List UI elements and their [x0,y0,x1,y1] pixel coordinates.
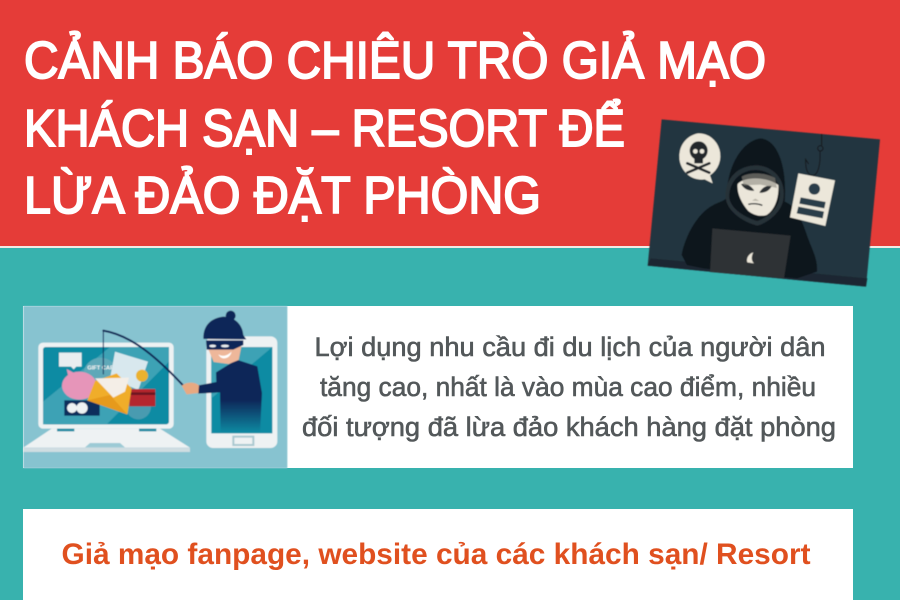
intro text: Lợi dụng nhu cầu đi du lịch của người dân [314,332,826,362]
section heading: Giả mạo fanpage, website của các khách sạn/ Resort [62,538,811,571]
laptop screen objects [59,352,155,419]
illustration: hooded hacker photo [648,119,880,287]
title: CẢNH BÁO CHIÊU TRÒ GIẢ MẠO [24,31,766,90]
laptop screen objects: GIFT CARD [87,366,118,372]
icon: skull speech bubble [679,133,720,183]
title [24,31,766,225]
panel: fake fanpage section [23,509,853,600]
mask [738,178,778,216]
thief [182,311,262,433]
fishing rod [103,331,183,386]
laptop [710,228,791,278]
illustration: phishing scam [23,306,287,468]
phone [206,336,277,448]
title: KHÁCH SẠN – RESORT ĐỂ [24,99,625,158]
intro text [302,332,836,442]
laptop [23,343,190,452]
header banner [0,0,900,248]
title: LỪA ĐẢO ĐẶT PHÒNG [24,166,541,225]
intro text: tăng cao, nhất là vào mùa cao điểm, nhiều [320,372,816,402]
panel: intro card [23,306,853,468]
hacker figure [682,138,817,278]
intro text: đối tượng đã lừa đảo khách hàng đặt phòng [302,412,836,442]
icon: fishing hook with login card [790,134,835,226]
